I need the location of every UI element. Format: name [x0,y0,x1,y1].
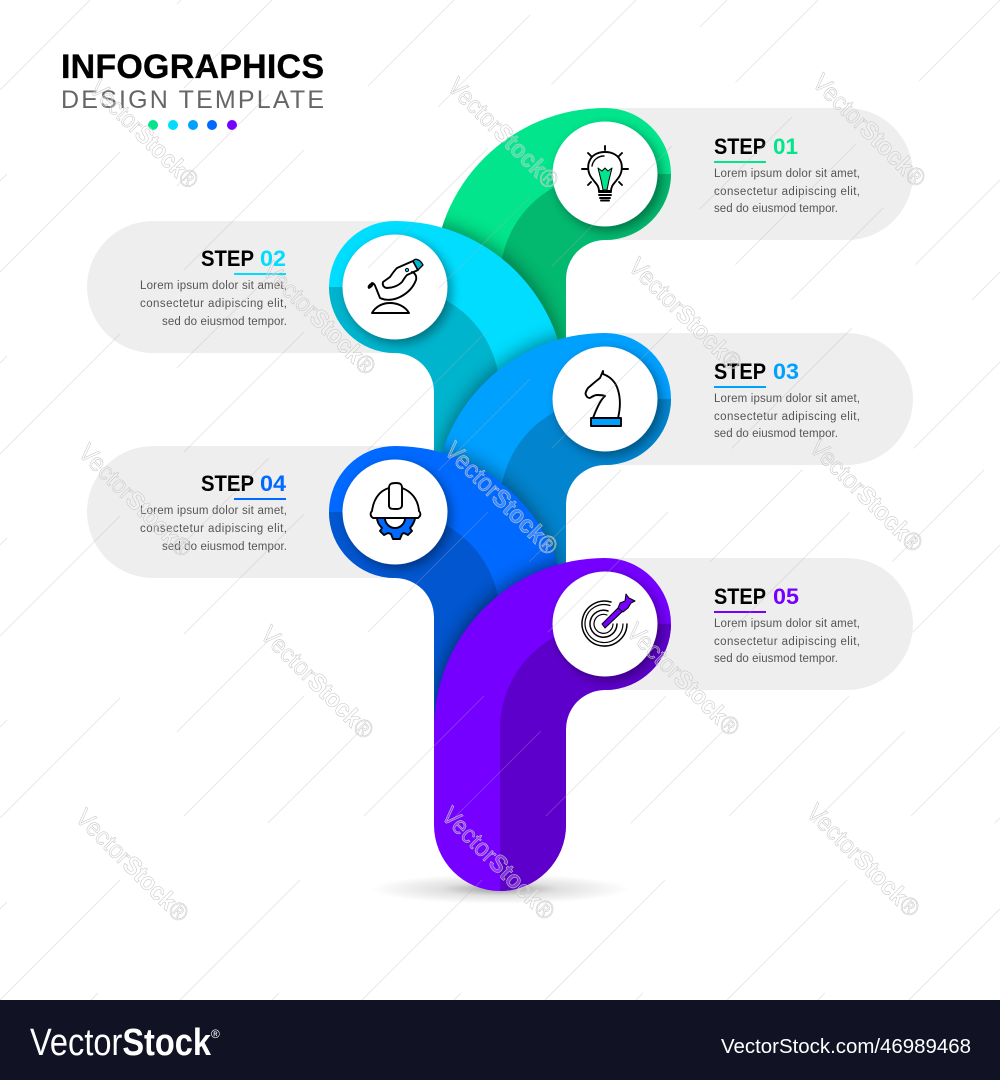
shape: step 03 sky blue ribbon [442,333,671,565]
icon: light bulb [582,146,628,200]
watermarks [70,68,932,928]
title: INFOGRAPHICS [61,48,324,86]
watermarks: VectorStock® [84,74,204,195]
footer bar [0,1000,1000,1080]
text block: step 02: 02 [260,246,286,271]
icon: target with arrow [582,594,635,646]
text block: step 02: STEP [201,246,254,271]
text block: step 03: Lorem ipsum dolor sit amet, [714,393,860,405]
text block: step 02: consectetur adipiscing elit, [140,298,287,310]
watermarks: VectorStock® [255,620,380,745]
text block: step 05: STEP [714,584,766,609]
watermarks: VectorStock® [807,68,932,193]
watermarks: VectorStock® [623,252,748,377]
watermarks: VectorStock® [257,256,382,381]
text block: step 01: 01 [773,134,798,159]
text block: step 01: STEP [714,134,766,159]
watermarks: VectorStock® [436,801,561,926]
footer registered mark: ® [211,1027,220,1041]
watermarks: VectorStock® [73,438,198,563]
watermarks: VectorStock® [439,436,564,561]
text block: step 01: Lorem ipsum dolor sit amet, [714,168,860,180]
text block: step 02: Lorem ipsum dolor sit amet, [140,280,287,292]
watermarks: VectorStock® [801,798,926,923]
icon: microscope [369,259,423,313]
text block: step 05: 05 [773,584,799,609]
text block: step 05: Lorem ipsum dolor sit amet, [714,618,860,630]
watermarks: VectorStock® [804,433,929,558]
text block: step 02: sed do eiusmod tempor. [162,316,287,328]
text block: step 04: Lorem ipsum dolor sit amet, [140,505,287,517]
footer image id: VectorStock.com/46989468 [721,1036,971,1058]
shape: step 05 purple ribbon [434,558,671,891]
panel: step 05 background pill [605,558,913,690]
ground shadow [370,874,630,904]
text block: step 05 [714,584,860,665]
footer logo: VectorStock [30,1022,212,1064]
text block: step 03: sed do eiusmod tempor. [714,428,838,440]
subtitle: DESIGN TEMPLATE [61,86,324,114]
text block: step 03: STEP [714,359,766,384]
watermarks: VectorStock® [442,72,564,195]
text block: step 01 [714,134,860,215]
text block: step 05: consectetur adipiscing elit, [714,636,860,648]
panel: step 02 background pill [87,221,395,353]
text block: step 04: sed do eiusmod tempor. [162,541,287,553]
icon: helmet and gear [371,483,420,539]
panel: step 04 background pill [87,446,395,578]
text block: step 04: STEP [201,471,254,496]
text block: step 03 [714,359,860,440]
legend dots [148,120,237,130]
text block: step 01: consectetur adipiscing elit, [714,186,860,198]
shape: step 01 green ribbon [442,108,671,340]
shape: step 02 cyan ribbon [329,221,558,453]
text block: step 03: 03 [773,359,799,384]
title [61,48,324,114]
panel: step 01 background pill [605,108,913,240]
text block: step 04: consectetur adipiscing elit, [140,523,287,535]
watermarks: VectorStock® [621,617,746,742]
shape: step 04 blue ribbon [329,446,558,728]
text block: step 03: consectetur adipiscing elit, [714,411,860,423]
text block: step 05: sed do eiusmod tempor. [714,653,838,665]
text block: step 04 [140,471,287,553]
watermarks: VectorStock® [70,803,195,928]
text block: step 04: 04 [260,471,287,496]
icon: chess knight [586,371,621,426]
text block: step 01: sed do eiusmod tempor. [714,203,838,215]
panel: step 03 background pill [605,333,913,465]
text block: step 02 [140,246,287,328]
